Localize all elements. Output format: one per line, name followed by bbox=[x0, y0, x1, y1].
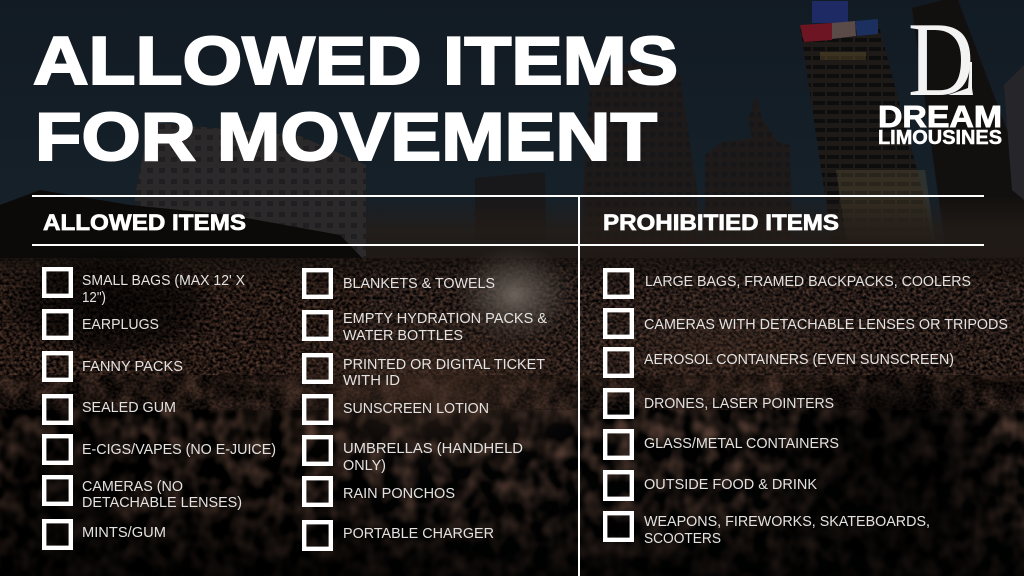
item: portable charger: PORTABLE CHARGER bbox=[343, 526, 494, 542]
item: umbrellas: ONLY) bbox=[343, 458, 386, 474]
item: large bags: LARGE BAGS, FRAMED BACKPACKS, COOLERS bbox=[645, 274, 971, 290]
item: small bags: 12") bbox=[82, 290, 106, 306]
item: weapons bbox=[605, 513, 930, 547]
logo: Dream Limousines: LIMOUSINES bbox=[878, 127, 1002, 149]
panel: allowed items, first column bbox=[44, 269, 276, 548]
item: cameras: CAMERAS (NO bbox=[82, 479, 183, 495]
item: rain ponchos: RAIN PONCHOS bbox=[343, 486, 455, 502]
item: sunscreen bbox=[304, 396, 489, 423]
item: drones bbox=[605, 390, 834, 417]
item: weapons: WEAPONS, FIREWORKS, SKATEBOARDS, bbox=[644, 514, 930, 530]
item: ticket: WITH ID bbox=[343, 373, 400, 389]
item: mints bbox=[44, 521, 166, 548]
logo: Dream Limousines bbox=[878, 1, 1002, 149]
logo: Dream Limousines: DREAM bbox=[878, 99, 1002, 134]
title: FOR MOVEMENT bbox=[35, 99, 657, 175]
item: ticket: PRINTED OR DIGITAL TICKET bbox=[343, 357, 545, 373]
item: glass containers: GLASS/METAL CONTAINERS bbox=[644, 436, 839, 452]
item: hydration packs: WATER BOTTLES bbox=[343, 328, 463, 344]
item: portable charger bbox=[304, 522, 494, 549]
item: e-cigs bbox=[44, 436, 276, 463]
item: fanny packs: FANNY PACKS bbox=[82, 359, 183, 375]
panel: allowed items, second column bbox=[304, 270, 547, 549]
item: ticket bbox=[304, 355, 545, 389]
item: blankets: BLANKETS & TOWELS bbox=[343, 276, 495, 292]
logo: Dream Limousines: D bbox=[908, 1, 974, 118]
heading: allowed items: ALLOWED ITEMS bbox=[43, 210, 246, 235]
title bbox=[33, 23, 678, 175]
item: earplugs bbox=[44, 311, 159, 338]
item: sunscreen: SUNSCREEN LOTION bbox=[343, 401, 489, 417]
heading: prohibited items: PROHIBITIED ITEMS bbox=[603, 210, 839, 235]
item: rain ponchos bbox=[304, 478, 455, 505]
item: drones: DRONES, LASER POINTERS bbox=[644, 396, 834, 412]
item: detachable cameras: CAMERAS WITH DETACHABLE LENSES OR TRIPODS bbox=[644, 317, 1008, 333]
item: sealed gum bbox=[44, 396, 176, 423]
item: cameras bbox=[44, 477, 242, 511]
item: cameras: DETACHABLE LENSES) bbox=[82, 495, 242, 511]
item: aerosol bbox=[605, 349, 954, 376]
item: mints: MINTS/GUM bbox=[82, 525, 166, 541]
table frame lines bbox=[32, 195, 984, 576]
item: small bags: SMALL BAGS (MAX 12' X bbox=[82, 273, 245, 289]
item: weapons: SCOOTERS bbox=[644, 531, 721, 547]
item: aerosol: AEROSOL CONTAINERS (EVEN SUNSCREEN) bbox=[644, 352, 954, 368]
item: glass containers bbox=[605, 431, 839, 458]
item: hydration packs bbox=[304, 311, 547, 344]
item: small bags bbox=[44, 269, 245, 306]
item: outside food bbox=[605, 472, 817, 499]
item: detachable cameras bbox=[605, 310, 1008, 337]
item: hydration packs: EMPTY HYDRATION PACKS & bbox=[343, 311, 547, 327]
item: blankets bbox=[304, 270, 495, 297]
item: sealed gum: SEALED GUM bbox=[82, 400, 176, 416]
panel: prohibited items bbox=[605, 270, 1008, 547]
item: e-cigs: E-CIGS/VAPES (NO E-JUICE) bbox=[82, 442, 276, 458]
item: umbrellas: UMBRELLAS (HANDHELD bbox=[343, 441, 523, 457]
item: earplugs: EARPLUGS bbox=[82, 317, 159, 333]
item: fanny packs bbox=[44, 353, 183, 380]
item: large bags bbox=[605, 270, 971, 297]
item: umbrellas bbox=[304, 437, 523, 474]
title: ALLOWED ITEMS bbox=[33, 23, 678, 99]
item: outside food: OUTSIDE FOOD & DRINK bbox=[644, 477, 817, 493]
